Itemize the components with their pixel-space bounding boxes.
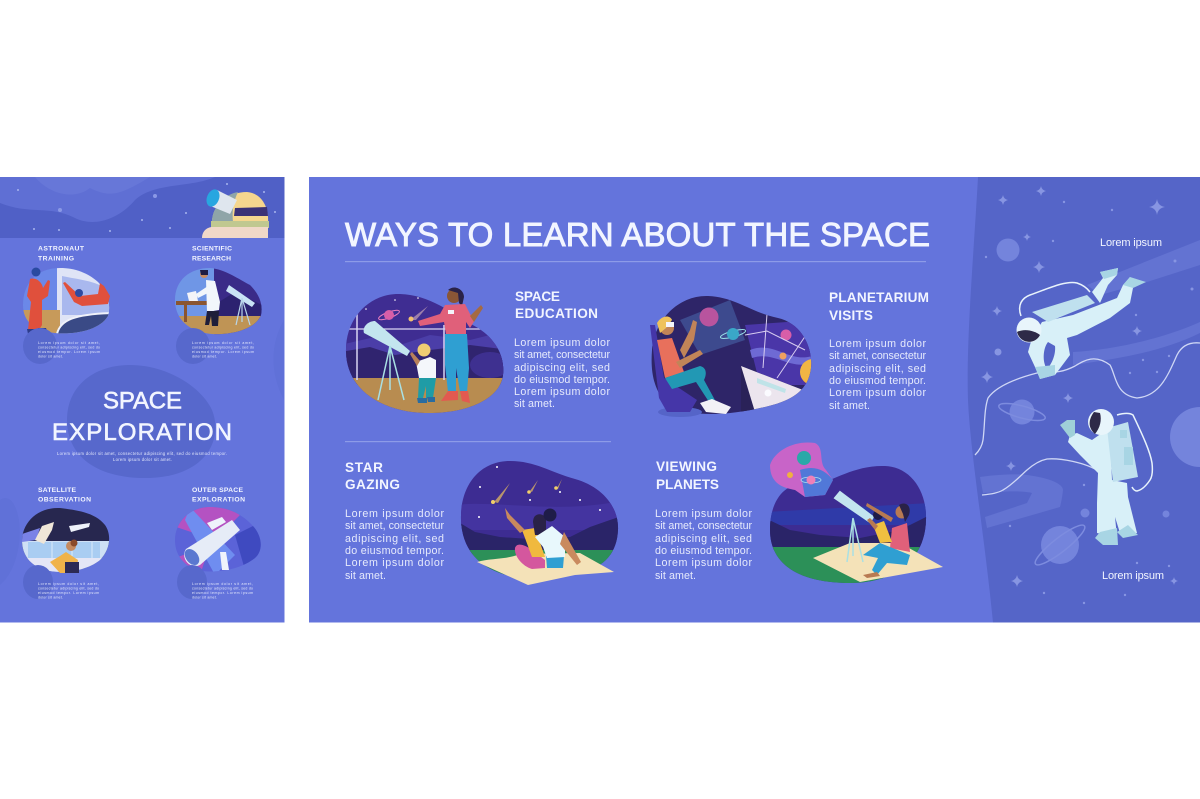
heading: planetarium visits: PLANETARIUM	[829, 290, 929, 305]
heading: space education: SPACE	[515, 289, 560, 304]
text: viewing planets: Lorem ipsum dolor	[655, 508, 752, 520]
heading: scientific research: SCIENTIFIC	[192, 246, 232, 252]
text: star gazing: Lorem ipsum dolor	[345, 557, 444, 569]
text: outer space exploration: consectetur adipiscing elit, sed do	[192, 586, 253, 590]
astronaut waving	[1060, 409, 1152, 545]
heading: space education	[515, 289, 598, 321]
poster subtitle: Lorem ipsum dolor sit amet.	[113, 457, 172, 462]
heading: outer space exploration	[192, 487, 245, 504]
heading: viewing planets	[656, 459, 719, 492]
heading: viewing planets: PLANETS	[656, 477, 719, 492]
text: viewing planets: sit amet, consectetur	[655, 520, 752, 532]
text: scientific research	[176, 328, 254, 364]
panel: space exploration poster	[0, 177, 284, 622]
heading: space education: EDUCATION	[515, 306, 598, 321]
text: outer space exploration: Lorem ipsum dolor sit amet,	[192, 582, 253, 586]
heading: planetarium visits: VISITS	[829, 308, 873, 323]
text: viewing planets	[655, 508, 752, 582]
heading: satellite observation: SATELLITE	[38, 487, 76, 494]
chair	[650, 325, 702, 417]
text: outer space exploration: eiusmod tempor. Lorem ipsum	[192, 591, 253, 595]
text: planetarium visits: sit amet.	[829, 400, 870, 412]
text: outer space exploration: dolor sit amet.	[192, 596, 217, 600]
text: viewing planets: Lorem ipsum dolor	[655, 557, 752, 569]
poster background shapes	[0, 320, 284, 585]
nebula with planets	[770, 442, 833, 497]
text: space education: Lorem ipsum dolor	[514, 337, 610, 349]
planets	[996, 238, 1200, 570]
illustration: space education	[346, 288, 504, 413]
man with VR headset	[657, 317, 731, 414]
text: star gazing	[345, 508, 444, 582]
heading: satellite observation	[38, 487, 91, 504]
text: space education: do eiusmod tempor.	[514, 374, 610, 386]
text: astronaut training	[23, 328, 100, 364]
text: star gazing: adipiscing elit, sed	[345, 533, 444, 545]
poster title	[52, 388, 232, 446]
text: scientific research: dolor sit amet.	[192, 354, 217, 358]
text: astronaut training: consectetur adipiscing elit, sed do	[38, 346, 100, 350]
text: satellite observation: Lorem ipsum dolor sit amet,	[38, 582, 99, 586]
poster title: SPACE	[103, 388, 182, 414]
tethers	[975, 343, 1200, 495]
astronaut floating	[1016, 268, 1146, 379]
illustration: viewing planets	[765, 442, 943, 587]
telescope	[364, 321, 410, 400]
text: planetarium visits: Lorem ipsum dolor	[829, 338, 926, 350]
text: space education: sit amet, consectetur	[514, 349, 610, 361]
heading: scientific research	[192, 246, 232, 262]
text: viewing planets: sit amet.	[655, 570, 696, 582]
illustration: planetarium visits	[650, 296, 812, 417]
text: viewing planets: adipiscing elit, sed	[655, 533, 752, 545]
icon: observatory	[202, 187, 269, 238]
heading: astronaut training: TRAINING	[38, 256, 74, 262]
text: planetarium visits: sit amet, consectetur	[829, 350, 926, 362]
panel: ways to learn	[309, 177, 1200, 622]
text: space education: sit amet.	[514, 398, 555, 410]
text: space education: Lorem ipsum dolor	[514, 386, 610, 398]
poster title: EXPLORATION	[52, 419, 232, 446]
text: satellite observation: consectetur adipiscing elit, sed do	[38, 586, 99, 590]
text: scientific research: consectetur adipiscing elit, sed do	[192, 346, 254, 350]
header band with sky	[0, 177, 284, 238]
couple	[505, 508, 581, 569]
illustration: astronaut training	[23, 268, 110, 334]
center blob with poster title	[52, 365, 232, 478]
text: planetarium visits	[829, 338, 926, 412]
blanket	[477, 553, 614, 585]
heading: star gazing	[345, 460, 400, 492]
text: astronaut training: dolor sit amet.	[38, 354, 63, 358]
text: outer space exploration	[177, 565, 253, 600]
telescope	[835, 492, 873, 562]
background waves	[980, 240, 1200, 528]
text: star gazing: sit amet.	[345, 570, 386, 582]
heading: outer space exploration: OUTER SPACE	[192, 487, 243, 494]
heading: astronaut training: ASTRONAUT	[38, 246, 85, 252]
heading: outer space exploration: EXPLORATION	[192, 496, 245, 504]
blanket	[813, 543, 943, 582]
heading: star gazing: GAZING	[345, 477, 400, 492]
caption bottom: Lorem ipsum	[1102, 570, 1164, 582]
text: scientific research: eiusmod tempor. Lorem ipsum	[192, 350, 254, 354]
poster subtitle	[57, 451, 227, 462]
poster subtitle: Lorem ipsum dolor sit amet, consectetur adipiscing elit, sed do eiusmod tempor.	[57, 451, 227, 456]
text: planetarium visits: Lorem ipsum dolor	[829, 387, 926, 399]
text: planetarium visits: do eiusmod tempor.	[829, 375, 926, 387]
heading: scientific research: RESEARCH	[192, 256, 231, 262]
mother and child	[863, 503, 910, 578]
heading: planetarium visits	[829, 290, 929, 323]
text: astronaut training: Lorem ipsum dolor sit amet,	[38, 341, 100, 345]
text: star gazing: Lorem ipsum dolor	[345, 508, 444, 520]
heading: viewing planets: VIEWING	[656, 459, 717, 474]
heading: astronaut training	[38, 246, 85, 262]
text: viewing planets: do eiusmod tempor.	[655, 545, 752, 557]
illustration: satellite observation	[22, 508, 110, 573]
child	[410, 344, 436, 403]
text: star gazing: sit amet, consectetur	[345, 520, 444, 532]
panel: astronaut side area	[968, 177, 1200, 622]
caption top: Lorem ipsum	[1100, 237, 1162, 249]
text: space education	[514, 337, 610, 410]
text: scientific research: Lorem ipsum dolor sit amet,	[192, 341, 254, 345]
text: planetarium visits: adipiscing elit, sed	[829, 363, 926, 375]
text: satellite observation	[23, 565, 99, 600]
stars	[981, 186, 1194, 604]
text: satellite observation: dolor sit amet.	[38, 596, 63, 600]
text: satellite observation: eiusmod tempor. Lorem ipsum	[38, 591, 99, 595]
text: star gazing: do eiusmod tempor.	[345, 545, 444, 557]
text: astronaut training: eiusmod tempor. Lorem ipsum	[38, 350, 100, 354]
main title: WAYS TO LEARN ABOUT THE SPACE	[345, 216, 930, 253]
woman	[418, 288, 483, 403]
illustration: scientific research	[175, 268, 262, 334]
text: space education: adipiscing elit, sed	[514, 362, 610, 374]
illustration: star gazing	[460, 461, 618, 585]
illustration: outer space exploration	[175, 507, 261, 572]
heading: star gazing: STAR	[345, 460, 383, 475]
heading: satellite observation: OBSERVATION	[38, 496, 91, 504]
